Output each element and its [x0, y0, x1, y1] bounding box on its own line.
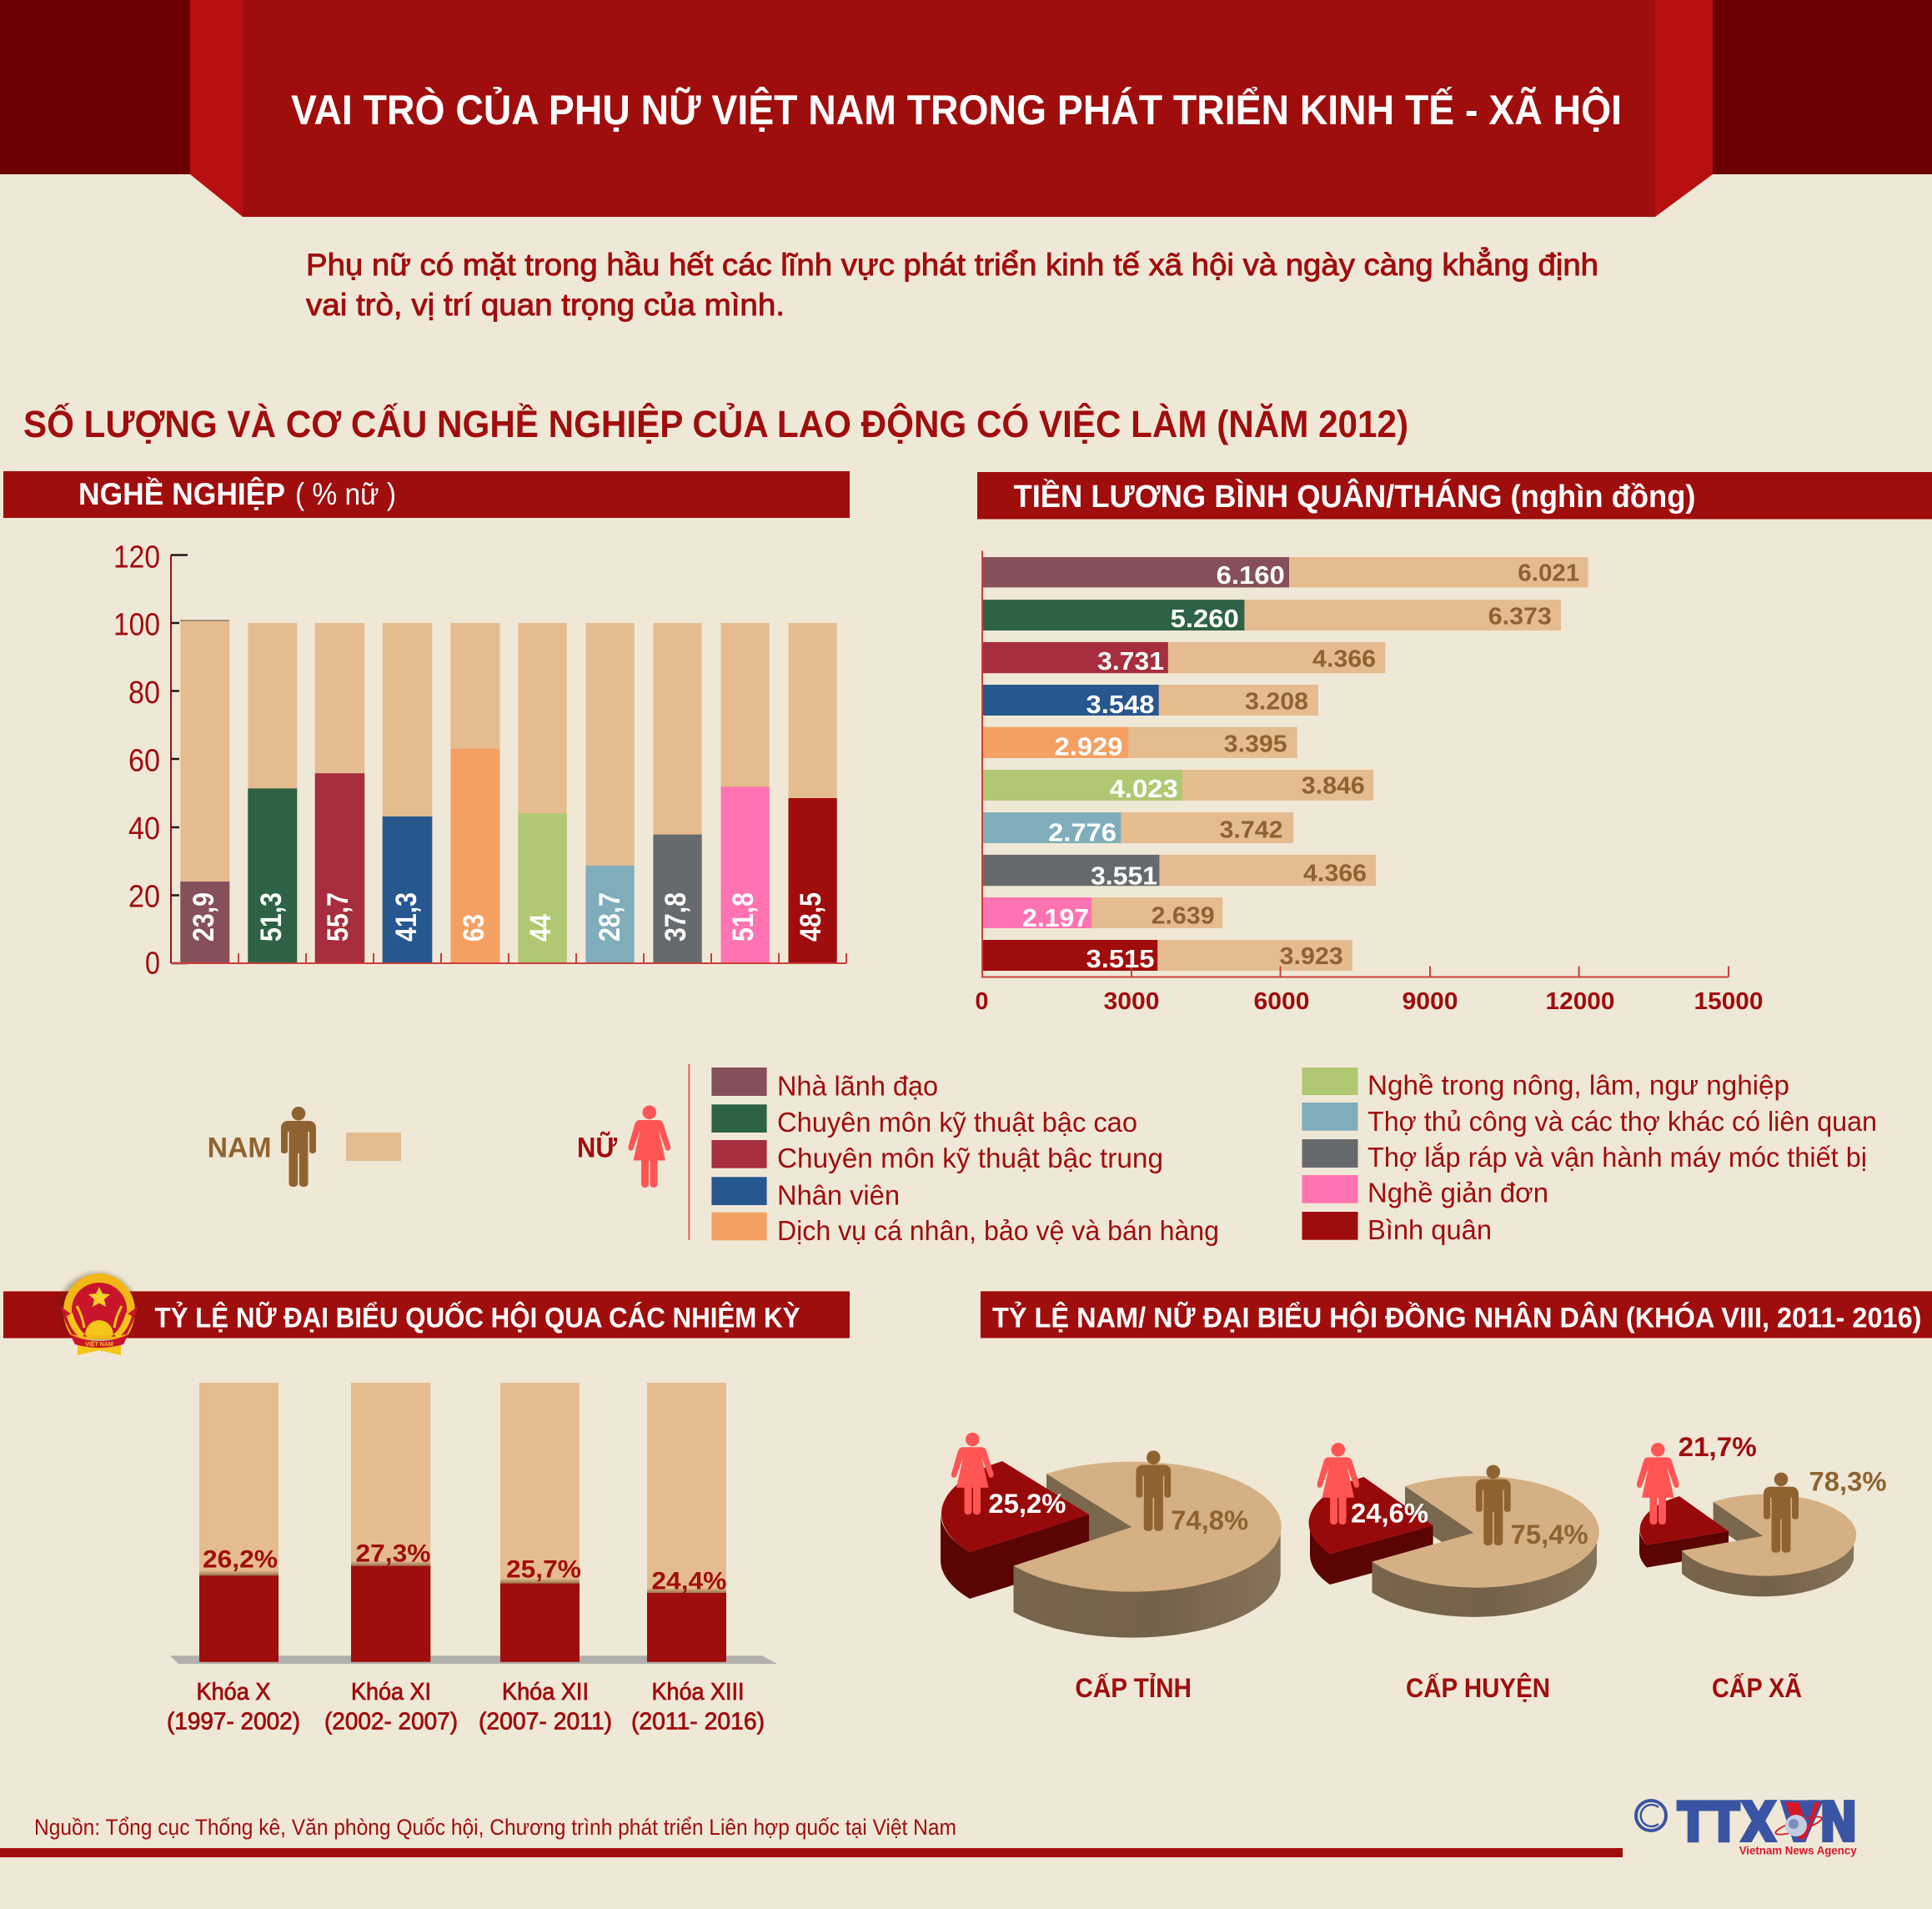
- title: VAI TRÒ CỦA PHỤ NỮ VIỆT NAM TRONG PHÁT TRIỂN KINH TẾ - XÃ HỘI: [291, 86, 1622, 133]
- pie chart: commune level: 78,3%: [1809, 1467, 1886, 1497]
- female salary values: 2.929: [1054, 732, 1122, 761]
- male salary values: 6.373: [1488, 604, 1552, 630]
- stacked bars: [180, 620, 837, 963]
- male salary values: 3.923: [1280, 943, 1343, 970]
- occupation legend: Thợ lắp ráp và vận hành máy móc thiết bị: [1367, 1142, 1867, 1173]
- y axis: 40: [128, 811, 160, 846]
- bar values: 28,7: [594, 892, 626, 942]
- y axis: 0: [145, 946, 160, 981]
- salary axis: 12000: [1546, 988, 1614, 1015]
- occupation legend: Dịch vụ cá nhân, bảo vệ và bán hàng: [777, 1215, 1219, 1246]
- bar values: 23,9: [188, 892, 220, 942]
- female salary values: 3.731: [1097, 646, 1164, 676]
- logo: TTXVN: Vietnam News Agency: [1739, 1843, 1857, 1856]
- male salary values: [1152, 560, 1579, 970]
- female salary values: 3.515: [1086, 944, 1154, 973]
- female salary values: [1022, 560, 1285, 973]
- salary axis: 3000: [1104, 988, 1159, 1015]
- floor shadow: [170, 1655, 777, 1664]
- bar values: 51,8: [727, 892, 760, 942]
- gender legend: [208, 1106, 670, 1188]
- pie chart: provincial level: 74,8%: [1171, 1505, 1248, 1535]
- occupation legend: Bình quân: [1367, 1214, 1492, 1245]
- salary heading bar: [977, 472, 1932, 519]
- pie chart: provincial level: [941, 1433, 1282, 1703]
- bar values: 44: [524, 914, 557, 942]
- pie chart: provincial level: CẤP TỈNH: [1075, 1673, 1192, 1703]
- occupation legend: Chuyên môn kỹ thuật bậc trung: [777, 1143, 1163, 1173]
- icon: national emblem: VIỆT NAM: [85, 1340, 113, 1348]
- pie chart: district level: 75,4%: [1511, 1520, 1588, 1550]
- y axis: 120: [113, 540, 160, 575]
- male salary values: 3.846: [1302, 773, 1365, 800]
- female salary values: 3.551: [1091, 861, 1157, 891]
- male salary values: 4.366: [1312, 646, 1376, 672]
- logo: TTXVN: TTXVN: [1678, 1792, 1857, 1854]
- salary axis: 15000: [1694, 988, 1763, 1015]
- bar values: 51,3: [255, 892, 288, 942]
- male salary values: 2.639: [1152, 902, 1215, 929]
- salary axis: 0: [975, 988, 989, 1015]
- salary heading bar: TIỀN LƯƠNG BÌNH QUÂN/THÁNG (nghìn đồng): [1014, 478, 1696, 515]
- occupation legend: Nhân viên: [777, 1179, 900, 1210]
- intro paragraph: vai trò, vị trí quan trọng của mình.: [306, 288, 785, 322]
- column: Khóa XI: 27,3%: [355, 1540, 430, 1568]
- bar values: 41,3: [390, 892, 423, 942]
- intro paragraph: Phụ nữ có mặt trong hầu hết các lĩnh vực phát triển kinh tế xã hội và ngày càng khẳng định: [306, 247, 1598, 282]
- panel: salary chart: [975, 472, 1932, 1015]
- y axis: 60: [128, 744, 160, 779]
- male key: NAM: [208, 1133, 272, 1164]
- pie chart: commune level: 21,7%: [1679, 1432, 1757, 1462]
- pie chart: district level: 24,6%: [1351, 1498, 1428, 1528]
- column: Khóa XII: 25,7%: [506, 1556, 581, 1584]
- occupation legend: Nghề giản đơn: [1367, 1178, 1548, 1208]
- bar values: 55,7: [322, 892, 354, 942]
- section heading: SỐ LƯỢNG VÀ CƠ CẤU NGHỀ NGHIỆP CỦA LAO ĐỘNG CÓ VIỆC LÀM (NĂM 2012): [23, 403, 1408, 445]
- occupation heading bar: ( % nữ ): [295, 477, 396, 511]
- panel: People's Council ratio: [941, 1291, 1932, 1703]
- panel: occupation chart: [3, 471, 850, 981]
- column: Khóa XI: (2002- 2007): [324, 1708, 458, 1735]
- y axis: 80: [128, 676, 160, 711]
- National Assembly heading bar: TỶ LỆ NỮ ĐẠI BIỂU QUỐC HỘI QUA CÁC NHIỆM KỲ: [155, 1301, 800, 1334]
- pie chart: commune level: CẤP XÃ: [1712, 1673, 1802, 1703]
- column: Khóa XI: Khóa XI: [351, 1679, 431, 1706]
- y axis: 20: [128, 879, 160, 914]
- People's Council heading bar: [981, 1291, 1932, 1338]
- female salary values: 3.548: [1086, 690, 1154, 719]
- occupation legend: Thợ thủ công và các thợ khác có liên quan: [1367, 1106, 1877, 1137]
- occupation legend: Nhà lãnh đạo: [777, 1070, 938, 1101]
- occupation legend: Nghề trong nông, lâm, ngư nghiệp: [1367, 1070, 1789, 1101]
- female salary values: 5.260: [1171, 604, 1239, 633]
- column: Khóa XII: [479, 1383, 612, 1735]
- female salary values: 2.776: [1048, 817, 1117, 846]
- column: Khóa X: 26,2%: [203, 1546, 278, 1574]
- pie chart: district level: [1309, 1443, 1599, 1703]
- male key: [208, 1107, 401, 1187]
- female salary values: 4.023: [1110, 774, 1178, 803]
- column: Khóa XII: Khóa XII: [502, 1679, 589, 1706]
- female key: NỮ: [577, 1133, 618, 1164]
- footer rule: [0, 1848, 1623, 1857]
- column: Khóa XII: (2007- 2011): [479, 1708, 612, 1735]
- intro paragraph: [306, 247, 1598, 322]
- bar values: [188, 892, 827, 942]
- header banner: [0, 0, 1932, 217]
- column: Khóa X: Khóa X: [197, 1679, 270, 1706]
- male salary values: 3.208: [1245, 689, 1308, 716]
- male salary values: 6.021: [1518, 560, 1579, 587]
- female salary values: 2.197: [1022, 903, 1089, 932]
- column: Khóa XI: [324, 1383, 458, 1735]
- bar values: 63: [458, 914, 490, 942]
- column: Khóa XIII: Khóa XIII: [652, 1679, 744, 1706]
- female key: [577, 1106, 670, 1188]
- bar values: 48,5: [795, 892, 827, 942]
- salary axis: [975, 550, 1763, 1015]
- x axis: [171, 953, 846, 963]
- y axis: [113, 540, 188, 981]
- occupation legend: Chuyên môn kỹ thuật bậc cao: [777, 1107, 1137, 1138]
- pie chart: commune level: [1637, 1432, 1886, 1703]
- pie chart: provincial level: 25,2%: [988, 1489, 1066, 1519]
- occupation legend: [689, 1064, 1877, 1246]
- column: Khóa XIII: 24,4%: [651, 1567, 726, 1595]
- icon: national emblem: [59, 1273, 138, 1355]
- male salary values: 3.742: [1219, 817, 1282, 844]
- column: Khóa X: (1997- 2002): [167, 1708, 300, 1735]
- column: Khóa XIII: (2011- 2016): [631, 1708, 765, 1735]
- pie chart: district level: CẤP HUYỆN: [1406, 1673, 1550, 1703]
- source note: Nguồn: Tổng cục Thống kê, Văn phòng Quốc hội, Chương trình phát triển Liên hợp quốc tại Việt Nam: [34, 1815, 956, 1840]
- National Assembly heading bar: [3, 1291, 850, 1338]
- bar values: 37,8: [660, 892, 692, 942]
- column: Khóa X: [167, 1383, 300, 1735]
- female salary values: 6.160: [1217, 560, 1285, 590]
- y axis: 100: [113, 607, 160, 642]
- column: Khóa XIII: [631, 1383, 765, 1735]
- salary axis: 6000: [1254, 988, 1309, 1015]
- horizontal bars: [982, 557, 1588, 971]
- panel: National Assembly female ratio: [3, 1273, 850, 1735]
- occupation heading bar: NGHỀ NGHIỆP: [78, 476, 285, 511]
- male salary values: 4.366: [1303, 861, 1367, 887]
- male salary values: 3.395: [1224, 731, 1287, 758]
- salary axis: 9000: [1403, 988, 1458, 1015]
- occupation heading bar: [3, 471, 850, 518]
